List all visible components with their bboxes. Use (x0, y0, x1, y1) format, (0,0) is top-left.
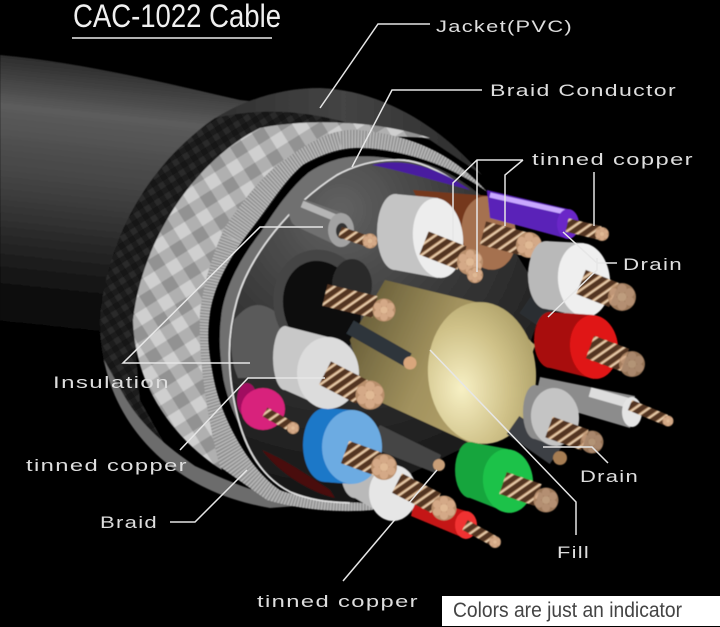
small drain bundle top (467, 267, 483, 283)
pink conductor (237, 383, 299, 434)
striped braid ring (205, 138, 490, 510)
dark red crescent (262, 450, 335, 498)
clear tube conductor (535, 377, 674, 428)
label: jacket: Jacket(PVC) (436, 17, 573, 36)
purple strip (372, 162, 470, 190)
shield ring (216, 153, 500, 500)
label: braid: Braid (100, 513, 158, 532)
woven braid surface (133, 122, 430, 470)
lower jacket crescent (104, 360, 310, 508)
white conductor left (273, 326, 384, 410)
cable illustration (0, 55, 674, 548)
shield highlight arc (229, 160, 453, 503)
dark drain to fill (350, 327, 416, 370)
title underline (72, 37, 272, 39)
label: insulation: Insulation (53, 373, 170, 392)
white conductor bottom (341, 446, 456, 521)
label: tinned copper top: tinned copper (532, 150, 694, 169)
green conductor (455, 442, 558, 515)
small insulated wire (289, 196, 378, 248)
purple conductor (487, 190, 609, 241)
label: drain lower: Drain (580, 467, 639, 486)
note box (442, 596, 720, 626)
label: tinned copper left: tinned copper (26, 456, 188, 475)
gold fill core (350, 280, 541, 448)
label: fill: Fill (557, 543, 590, 562)
large dark tube (259, 237, 385, 373)
dark drain right (525, 305, 566, 334)
carbon outer band (100, 112, 345, 468)
blue conductor (303, 408, 397, 484)
dark tube lower middle (365, 425, 445, 473)
red conductor (534, 312, 645, 381)
grey conductor lower right (513, 385, 604, 465)
inner cavity (229, 160, 545, 503)
note box: Colors are just an indicator (453, 599, 682, 622)
dark wire with copper (upper left) (325, 295, 396, 322)
label: braid conductor: Braid Conductor (490, 81, 677, 100)
white conductor right (528, 240, 636, 320)
grey tube left (231, 305, 285, 378)
jacket body (0, 55, 330, 420)
jacket cut face (205, 88, 482, 175)
leader lines (123, 24, 617, 581)
label: drain upper: Drain (623, 255, 683, 274)
label: tinned copper bottom: tinned copper (257, 592, 419, 611)
brown conductor (413, 190, 542, 274)
white conductor top (377, 194, 483, 280)
red small conductor (411, 496, 501, 548)
